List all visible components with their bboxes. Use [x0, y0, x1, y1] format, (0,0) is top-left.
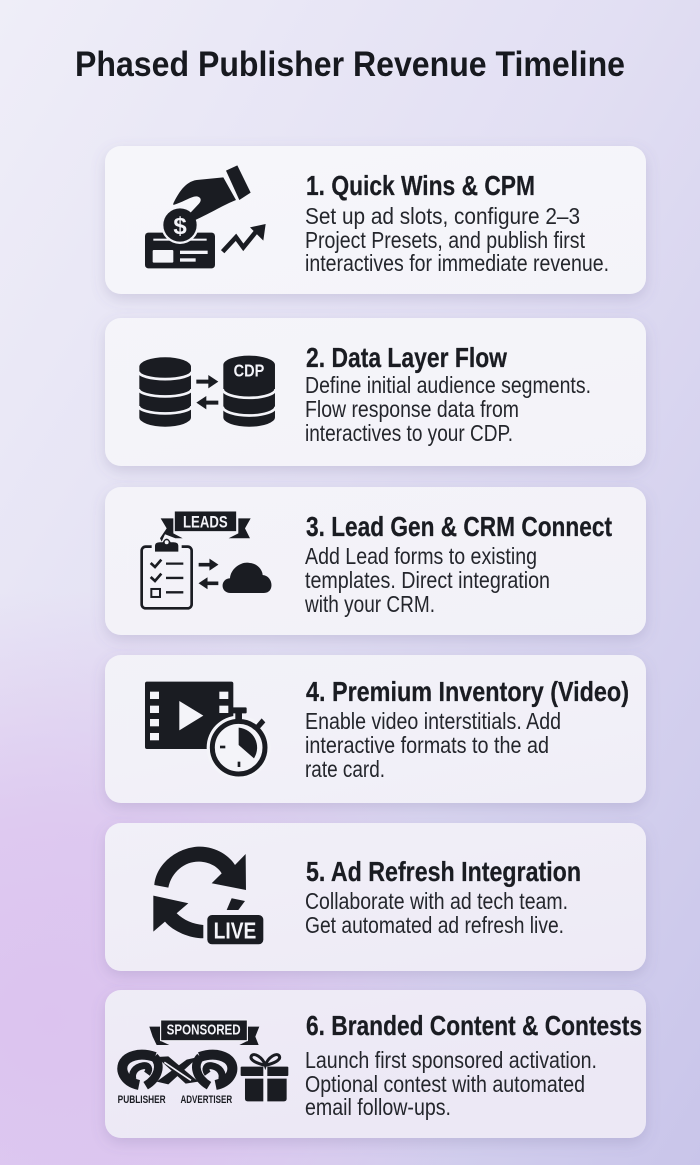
text: step 5 description: Get automated ad refresh live. — [305, 912, 564, 938]
text: step 5 description: Collaborate with ad tech team. — [305, 888, 568, 914]
text: step 1 description: Set up ad slots, configure 2–3 — [305, 203, 580, 229]
icon: film strip and stopwatch — [145, 682, 271, 780]
text: step 4 description — [305, 708, 561, 782]
panel: step 3 lead gen — [105, 487, 646, 635]
text: step 6 description: email follow-ups. — [305, 1094, 451, 1120]
text: step 1 description: interactives for immediate revenue. — [305, 250, 609, 276]
icon: refresh arrows with live badge — [153, 847, 263, 944]
panel: step 1 quick wins — [105, 146, 646, 294]
text: step 3 description: with your CRM. — [304, 591, 435, 617]
text: step 2 description — [305, 372, 591, 446]
text: step 4 description: rate card. — [305, 756, 385, 782]
heading: step 5: 5. Ad Refresh Integration — [306, 856, 581, 887]
heading: step 3: 3. Lead Gen & CRM Connect — [306, 511, 612, 542]
icon: hand dropping coin into card — [145, 165, 266, 268]
text: step 3 description: templates. Direct integration — [305, 567, 550, 593]
text: step 1 description: Project Presets, and publish first — [305, 227, 586, 253]
panel: step 6 branded content — [105, 990, 646, 1138]
icon: leads clipboard and cloud — [142, 511, 271, 608]
heading: step 1: 1. Quick Wins & CPM — [306, 170, 535, 201]
text: step 3 description: Add Lead forms to existing — [305, 543, 537, 569]
icon: sponsored banner and gift — [149, 1020, 288, 1103]
text: step 5 description — [305, 888, 568, 938]
text: step 4 description: interactive formats to the ad — [305, 732, 549, 758]
text: step 2 description: Flow response data from — [305, 396, 519, 422]
text: step 6 description — [305, 1047, 597, 1120]
text: step 4 description: Enable video interstitials. Add — [305, 708, 561, 734]
text: step 1 description — [305, 203, 609, 276]
heading: step 4: 4. Premium Inventory (Video) — [306, 676, 629, 707]
text: step 3 description — [304, 543, 550, 617]
heading: step 2: 2. Data Layer Flow — [306, 342, 507, 373]
panel: step 4 premium inventory — [105, 655, 646, 803]
text: step 6 description: Optional contest with automated — [305, 1071, 585, 1097]
icon: databases to CDP: CDP — [234, 361, 264, 381]
icon: publisher and advertiser link — [118, 1055, 232, 1106]
text: step 2 description: Define initial audience segments. — [305, 372, 591, 398]
title: Phased Publisher Revenue Timeline — [75, 45, 625, 84]
icon: hand dropping coin into card: $ — [173, 213, 187, 240]
icon: sponsored banner and gift: SPONSORED — [167, 1023, 241, 1039]
icon: leads clipboard and cloud: LEADS — [183, 512, 228, 531]
text: step 6 description: Launch first sponsored activation. — [305, 1047, 597, 1073]
icon: databases to CDP — [139, 356, 276, 427]
panel: step 5 ad refresh — [105, 823, 646, 971]
text: step 2 description: interactives to your CDP. — [305, 420, 513, 446]
panel: step 2 data layer — [105, 318, 646, 466]
icon: publisher and advertiser link: PUBLISHER — [118, 1094, 166, 1106]
icon: refresh arrows with live badge: LIVE — [214, 917, 256, 943]
icon: publisher and advertiser link: ADVERTISER — [180, 1094, 232, 1106]
